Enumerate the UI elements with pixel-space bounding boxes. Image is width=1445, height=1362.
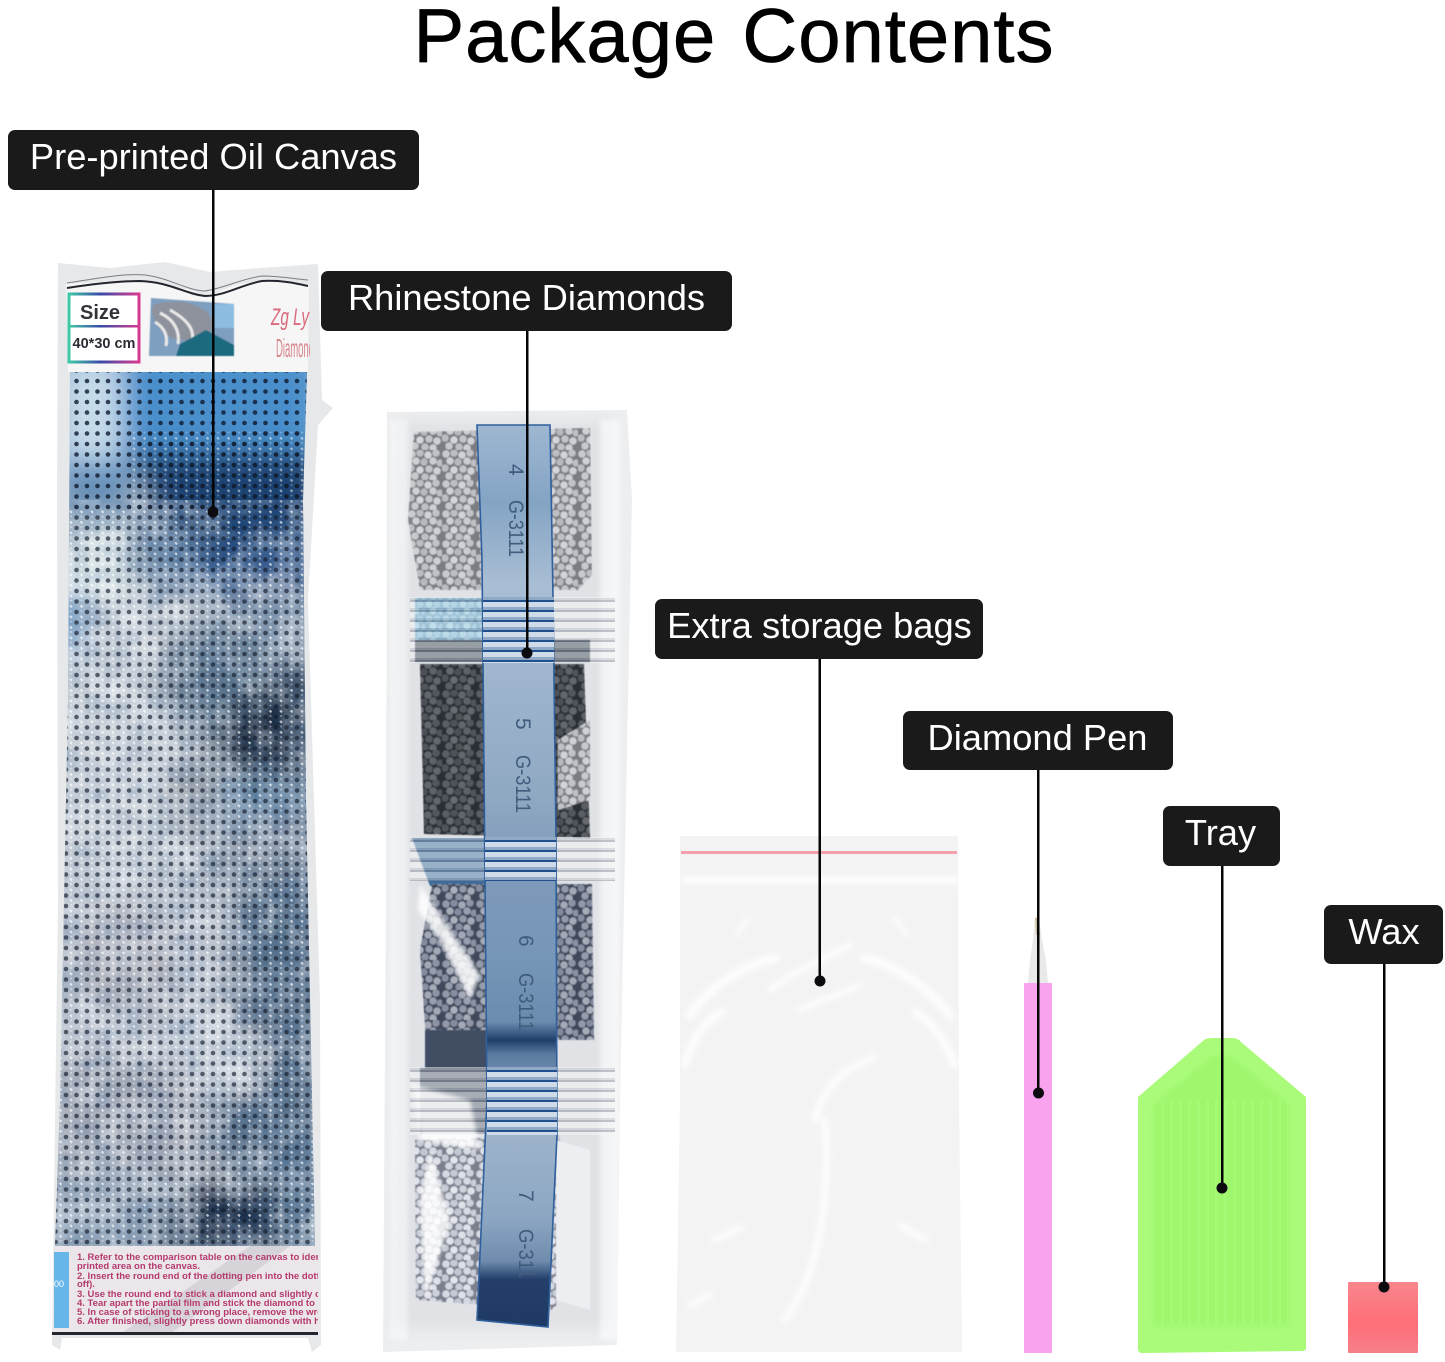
label text: 6 xyxy=(514,935,537,947)
callout: tray xyxy=(1163,806,1280,1194)
bag body xyxy=(676,836,962,1352)
inner bag shading xyxy=(406,424,600,1326)
brand text: Zg Ly xyxy=(270,304,310,331)
callout: wax: Wax xyxy=(1348,911,1420,952)
zipper bands across bag xyxy=(410,597,615,1135)
label text: G-311 xyxy=(514,1229,537,1279)
callout: diamond pen xyxy=(903,711,1173,1098)
label text: 4 xyxy=(504,464,527,476)
printed header band xyxy=(66,279,309,372)
callout: rhinestone diamonds xyxy=(321,271,732,658)
label text: G-3111 xyxy=(511,755,534,813)
blue label strip xyxy=(477,425,557,1327)
callout: diamond pen: Diamond Pen xyxy=(928,717,1147,758)
instruction strip xyxy=(52,1246,337,1335)
label strip zipper rows xyxy=(483,597,557,1135)
plastic wrinkles xyxy=(684,880,956,1320)
instruction strip: 1. Refer to the comparison table on the canvas to identify xyxy=(77,1252,336,1263)
panel: pre-printed oil canvas package xyxy=(50,262,337,1352)
callout: tray: Tray xyxy=(1185,812,1257,853)
label text xyxy=(509,464,534,1278)
panel: tray xyxy=(1138,1038,1306,1353)
beads: colour 4 xyxy=(408,428,592,590)
seal strip xyxy=(681,851,957,854)
instruction strip: 2. Insert the round end of the dotting pen into the dotting xyxy=(77,1271,334,1282)
instruction strip: 3. Use the round end to stick a diamond and slightly on xyxy=(77,1289,327,1300)
pen tip xyxy=(1028,918,1048,983)
label text: 5 xyxy=(511,718,534,730)
panel: diamond pen xyxy=(1024,917,1052,1353)
beads group xyxy=(408,428,594,1310)
callout: pre-printed oil canvas xyxy=(8,130,419,518)
instruction strip: off). xyxy=(77,1279,95,1290)
label text: G-3111 xyxy=(514,973,537,1031)
film glare xyxy=(390,420,620,1340)
instruction strip: 4. Tear apart the partial film and stick the diamond to it xyxy=(77,1298,324,1309)
header wave lines xyxy=(67,275,308,296)
callout: pre-printed oil canvas: Pre-printed Oil Canvas xyxy=(30,136,397,177)
size badge: Size xyxy=(80,302,120,324)
instruction strip: 5. In case of sticking to a wrong place, remove the wrong xyxy=(77,1307,335,1318)
instruction strip: 6. After finished, slightly press down diamonds with hand xyxy=(77,1316,337,1327)
callout: rhinestone diamonds: Rhinestone Diamonds xyxy=(348,277,705,318)
beads: colour 7 xyxy=(415,1135,560,1310)
brand text xyxy=(270,308,310,358)
panel: extra storage bag xyxy=(676,836,962,1352)
pen body xyxy=(1024,983,1052,1353)
callout: extra storage bags xyxy=(655,599,983,986)
beads: light blue xyxy=(414,598,482,640)
brand text: Diamond xyxy=(276,334,314,364)
outer plastic bag xyxy=(383,410,632,1352)
callout: wax xyxy=(1324,905,1443,1292)
tray well xyxy=(1153,1056,1290,1327)
label text: G-3111 xyxy=(504,500,527,557)
beads: colour 6 xyxy=(420,884,594,1040)
tray ribs xyxy=(1155,1100,1288,1325)
beads: colour 5 xyxy=(420,664,590,838)
beads: dark blue block xyxy=(412,838,490,886)
tray outer xyxy=(1138,1038,1306,1353)
size badge xyxy=(69,294,139,362)
size badge: 40*30 cm xyxy=(73,336,135,352)
panel: wax xyxy=(1348,1282,1418,1353)
thumbnail image xyxy=(149,298,234,356)
panel: rhinestone diamonds bag xyxy=(383,410,632,1352)
label text: 7 xyxy=(514,1190,537,1202)
plastic sleeve xyxy=(52,262,333,1352)
instruction strip: 00 xyxy=(54,1279,64,1289)
instruction strip: printed area on the canvas. xyxy=(77,1261,200,1272)
callout: extra storage bags: Extra storage bags xyxy=(667,605,972,646)
printed pattern canvas xyxy=(50,350,320,1250)
